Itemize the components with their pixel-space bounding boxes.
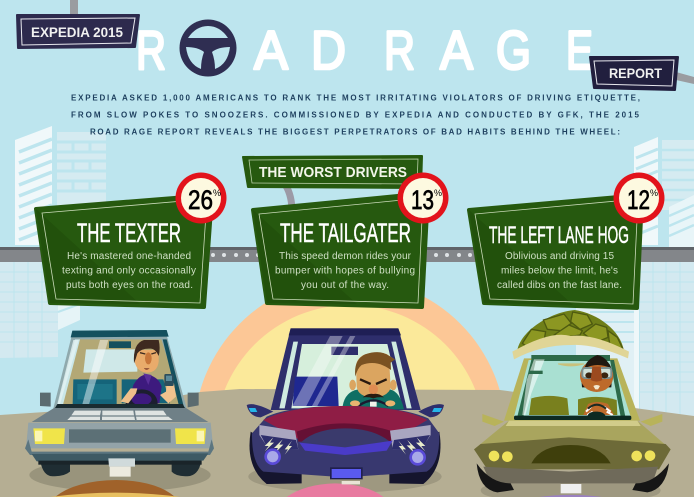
icon: steering wheel — [180, 20, 236, 76]
sign: the worst drivers — [243, 156, 422, 188]
driver: tailgater — [343, 352, 404, 409]
description: texter: puts both eyes on the road. — [66, 280, 193, 291]
description: tailgater: bumper with hopes of bullying — [275, 266, 415, 276]
turtle shell — [517, 310, 624, 351]
badge: 12 percent: 12 — [627, 185, 650, 215]
panel: the texter — [36, 172, 226, 307]
badge: 13 percent — [398, 172, 448, 224]
driver: lane hog — [580, 355, 614, 417]
pole: expedia sign — [70, 0, 78, 16]
sign board: hog — [469, 195, 642, 308]
panel: the left lane hog — [469, 172, 664, 308]
title: road rage: R — [136, 19, 166, 81]
title: road rage: A — [440, 19, 473, 81]
badge: 26 percent: % — [213, 188, 221, 198]
panel: the tailgater — [253, 172, 448, 307]
description: hog: called dibs on the fast lane. — [497, 280, 622, 291]
badge: 26 percent — [176, 172, 226, 224]
description: tailgater: This speed demon rides your — [279, 251, 412, 262]
title: road rage: E — [566, 19, 593, 81]
description: tailgater — [275, 251, 415, 291]
left background buildings — [0, 126, 106, 358]
pole: worst drivers sign — [286, 186, 292, 212]
title: road rage: R — [384, 19, 415, 81]
highway gantry bar — [0, 247, 694, 262]
heading: the tailgater: THE TAILGATER — [280, 218, 411, 248]
badge: 12 percent — [614, 172, 664, 224]
title: road rage: A — [254, 19, 288, 81]
road ground — [0, 389, 694, 497]
badge: 13 percent: 13 — [411, 185, 434, 215]
car: texter grey sedan — [25, 330, 214, 497]
sign: expedia 2015 — [17, 15, 139, 48]
badge: 12 percent: % — [650, 188, 658, 198]
pole: report sign — [676, 72, 694, 84]
intro text: FROM SLOW POKES TO SNOOZERS. COMMISSIONED BY EXPEDIA AND CONDUCTED BY GFK, THE 2015 — [71, 110, 640, 120]
description: tailgater: you out of the way. — [301, 280, 389, 291]
heading: the texter: THE TEXTER — [77, 218, 181, 248]
sign: the worst drivers: THE WORST DRIVERS — [259, 164, 407, 181]
sign board: texter — [36, 195, 212, 307]
intro text: ROAD RAGE REPORT REVEALS THE BIGGEST PERPETRATORS OF BAD HABITS BEHIND THE WHEEL: — [90, 128, 620, 136]
title: road rage — [136, 19, 593, 81]
car: tailgater navy muscle car — [247, 328, 444, 497]
right background buildings — [576, 137, 694, 422]
sign: report: REPORT — [609, 66, 663, 81]
intro text — [71, 94, 640, 136]
description: hog: Oblivious and driving 15 — [505, 251, 614, 262]
intro text: EXPEDIA ASKED 1,000 AMERICANS TO RANK THE MOST IRRITATING VIOLATORS OF DRIVING ETIQUETTE, — [71, 94, 640, 102]
sun — [194, 278, 506, 497]
description: texter — [62, 251, 196, 291]
description: texter: He's mastered one-handed — [67, 251, 191, 262]
title: road rage: G — [496, 19, 531, 81]
description: texter: texting and only occasionally — [62, 266, 196, 276]
driver: texter — [121, 340, 176, 417]
badge: 13 percent: % — [434, 188, 442, 198]
description: hog — [497, 251, 622, 291]
description: hog: miles below the limit, he's — [501, 266, 618, 276]
title: road rage: D — [311, 19, 346, 81]
badge: 26 percent: 26 — [188, 185, 213, 215]
sign: expedia 2015: EXPEDIA 2015 — [31, 25, 123, 40]
sign: report — [590, 57, 678, 90]
sign board: tailgater — [253, 193, 428, 307]
car: left lane hog olive car with turtle shell — [474, 310, 671, 497]
